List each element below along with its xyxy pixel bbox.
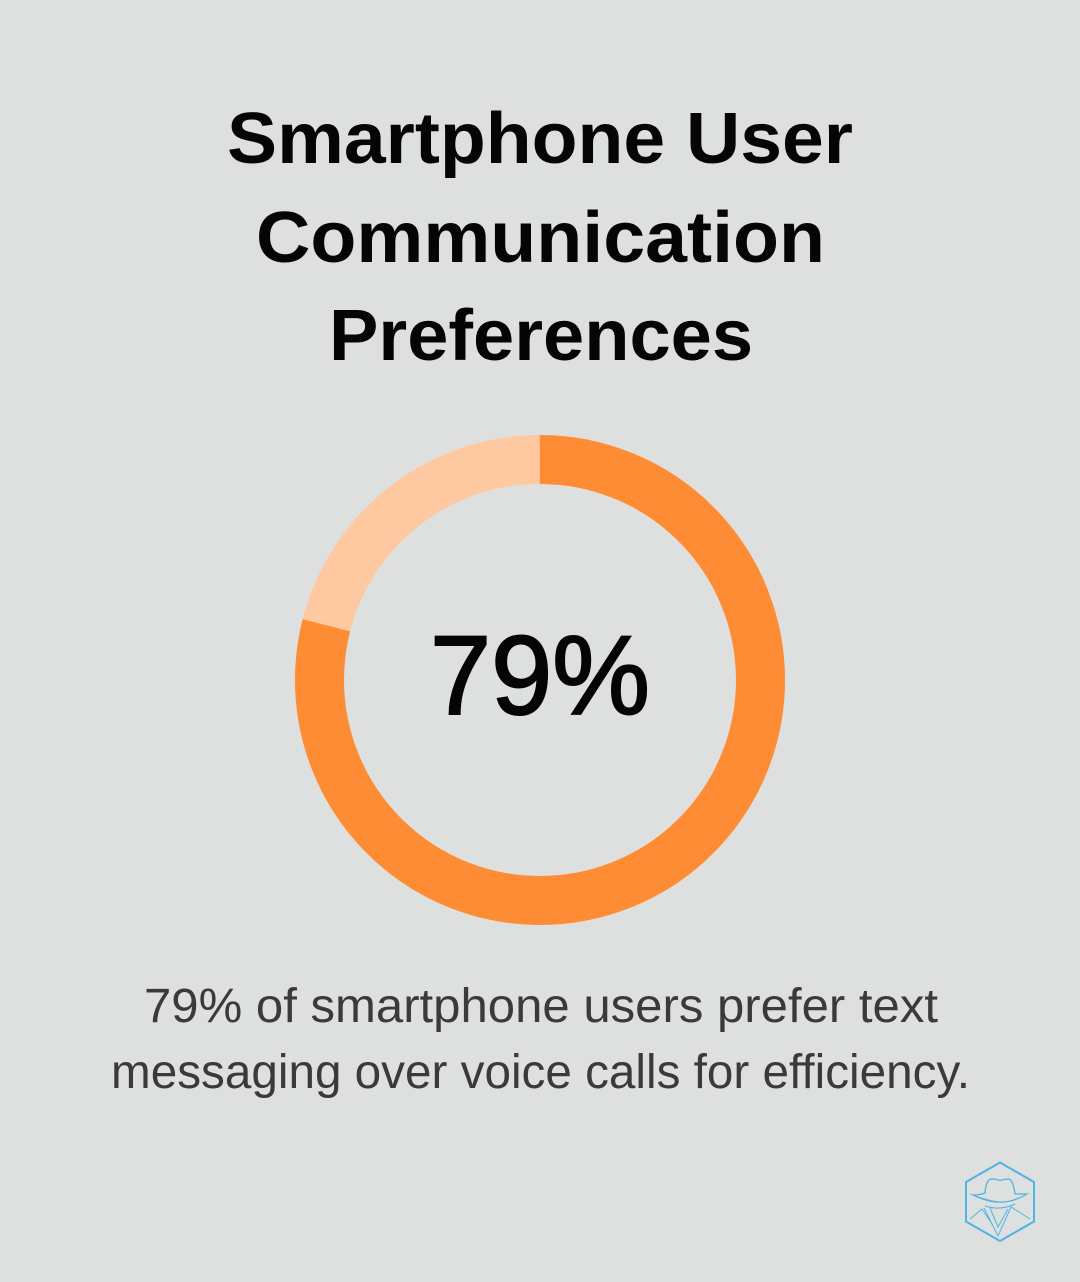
title: Smartphone User [227, 99, 853, 179]
caption [111, 980, 970, 1099]
caption: 79% of smartphone users prefer text [144, 980, 938, 1033]
title: Preferences [329, 296, 753, 376]
donut chart: 79% [320, 460, 760, 900]
title: Communication [256, 198, 825, 278]
donut value: 79% [430, 613, 650, 738]
title [227, 99, 853, 376]
icon: hexagon logo with hat [966, 1162, 1034, 1241]
caption: messaging over voice calls for efficiency. [111, 1046, 970, 1099]
